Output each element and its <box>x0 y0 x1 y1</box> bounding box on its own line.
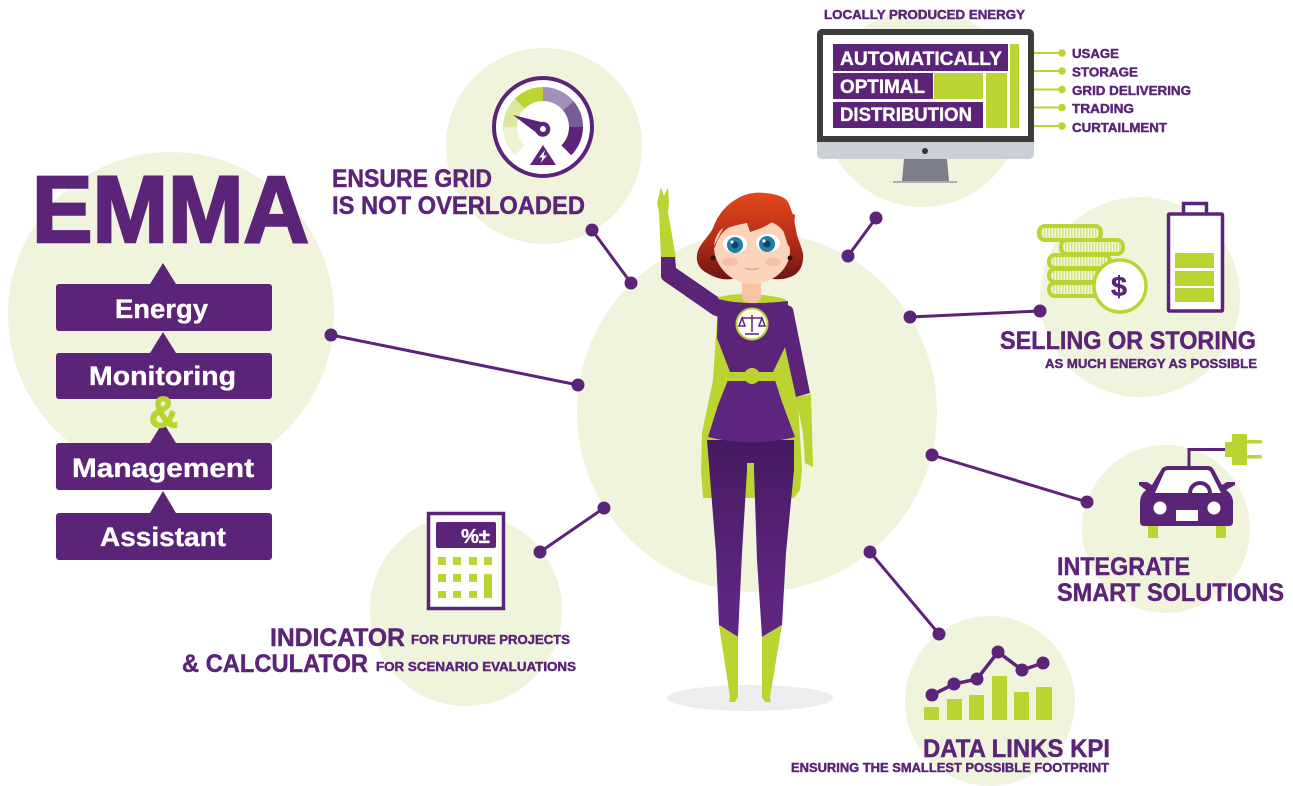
label: integrate smart solutions: SMART SOLUTIONS <box>1057 579 1284 607</box>
connector: selling to centre <box>904 304 1046 324</box>
background circle: selling or storing <box>1040 197 1240 397</box>
skirt section <box>708 380 795 442</box>
background circle: EMMA <box>8 152 334 478</box>
connector: EMMA to centre <box>324 328 584 392</box>
background circle: calculator <box>370 514 562 706</box>
label: indicator and calculator <box>182 624 576 678</box>
background circle: smart solutions <box>1082 445 1250 613</box>
box: Energy <box>56 263 272 331</box>
icon: grid load gauge <box>494 78 592 176</box>
connector: car to centre <box>926 448 1094 508</box>
legend: monitor outputs: GRID DELIVERING <box>1072 83 1191 98</box>
cheeks and mouth <box>710 256 792 270</box>
label: data links KPI <box>791 735 1110 775</box>
icon: monitor <box>817 29 1034 183</box>
legend: monitor outputs <box>1034 46 1191 135</box>
label: integrate smart solutions: INTEGRATE <box>1057 553 1190 581</box>
connector: gauge to centre <box>586 224 638 290</box>
label: ensure grid: ENSURE GRID <box>332 165 492 193</box>
label: ensure grid: IS NOT OVERLOADED <box>332 192 585 220</box>
heading: locally produced energy: LOCALLY PRODUCED ENERGY <box>824 8 1026 22</box>
legend: monitor outputs: USAGE <box>1072 46 1119 61</box>
legend: monitor outputs: CURTAILMENT <box>1072 120 1167 135</box>
background circle: central character <box>577 232 937 592</box>
icon: battery <box>1168 204 1222 311</box>
box: Monitoring <box>56 332 272 399</box>
title: EMMA: EMMA <box>32 157 309 263</box>
icon: coins: $ <box>1111 271 1127 302</box>
label: data links KPI: ENSURING THE SMALLEST POSSIBLE FOOTPRINT <box>791 761 1109 775</box>
box: Energy: Energy <box>115 294 208 324</box>
label: integrate smart solutions <box>1057 553 1284 607</box>
character: superhero Emma <box>657 187 833 711</box>
ampersand: & <box>149 388 178 437</box>
boots <box>719 625 782 702</box>
icon: calculator <box>428 514 504 608</box>
label: selling or storing: AS MUCH ENERGY AS POSSIBLE <box>1045 356 1257 371</box>
icon: calculator: %± <box>461 526 490 548</box>
box: Assistant: Assistant <box>100 522 226 552</box>
hair back <box>697 193 803 279</box>
lowered sleeve <box>784 305 810 397</box>
belt <box>728 368 775 384</box>
background circle: grid gauge <box>446 48 642 244</box>
label: indicator and calculator: FOR FUTURE PROJECTS <box>411 633 570 647</box>
raised glove <box>657 187 676 258</box>
legend: monitor outputs: STORAGE <box>1072 64 1138 80</box>
label: indicator and calculator: FOR SCENARIO EVALUATIONS <box>376 660 576 674</box>
badge: scales emblem <box>736 308 768 340</box>
face <box>714 222 790 284</box>
icon: coins <box>1039 226 1146 312</box>
box: Management <box>56 422 272 490</box>
torso <box>717 299 788 372</box>
legend: monitor outputs: TRADING <box>1072 101 1134 116</box>
label: selling or storing <box>1000 327 1257 371</box>
background circle: monitor <box>823 9 1021 207</box>
cape <box>701 294 802 498</box>
icon: electric car and plug <box>1139 434 1262 538</box>
label: ensure grid <box>332 165 585 220</box>
raised sleeve <box>661 257 722 318</box>
screen block: automatically: AUTOMATICALLY <box>840 49 1002 70</box>
label: selling or storing: SELLING OR STORING <box>1000 327 1256 355</box>
ground shadow <box>667 685 833 711</box>
box: Management: Management <box>72 453 254 483</box>
box: Assistant <box>56 491 272 560</box>
lowered glove <box>796 394 813 467</box>
eyes <box>723 234 780 253</box>
connector: monitor to centre <box>842 212 882 262</box>
fringe <box>712 198 795 250</box>
label: indicator and calculator: & CALCULATOR <box>182 650 368 678</box>
screen block: optimal <box>833 73 933 99</box>
label: indicator and calculator: INDICATOR <box>270 624 405 652</box>
neck <box>742 276 761 303</box>
screen block: optimal: OPTIMAL <box>840 77 925 98</box>
legs <box>707 440 794 637</box>
label: data links KPI: DATA LINKS KPI <box>923 735 1110 763</box>
screen green blocks <box>934 44 1019 128</box>
connector: data to centre <box>864 546 946 640</box>
screen block: distribution: DISTRIBUTION <box>840 105 972 126</box>
box: Monitoring: Monitoring <box>89 361 236 391</box>
chart: KPI bars and line <box>924 646 1052 720</box>
connector: calculator to centre <box>534 502 610 558</box>
background circle: data links <box>905 616 1075 786</box>
panel: EMMA acronym stack <box>56 263 272 560</box>
